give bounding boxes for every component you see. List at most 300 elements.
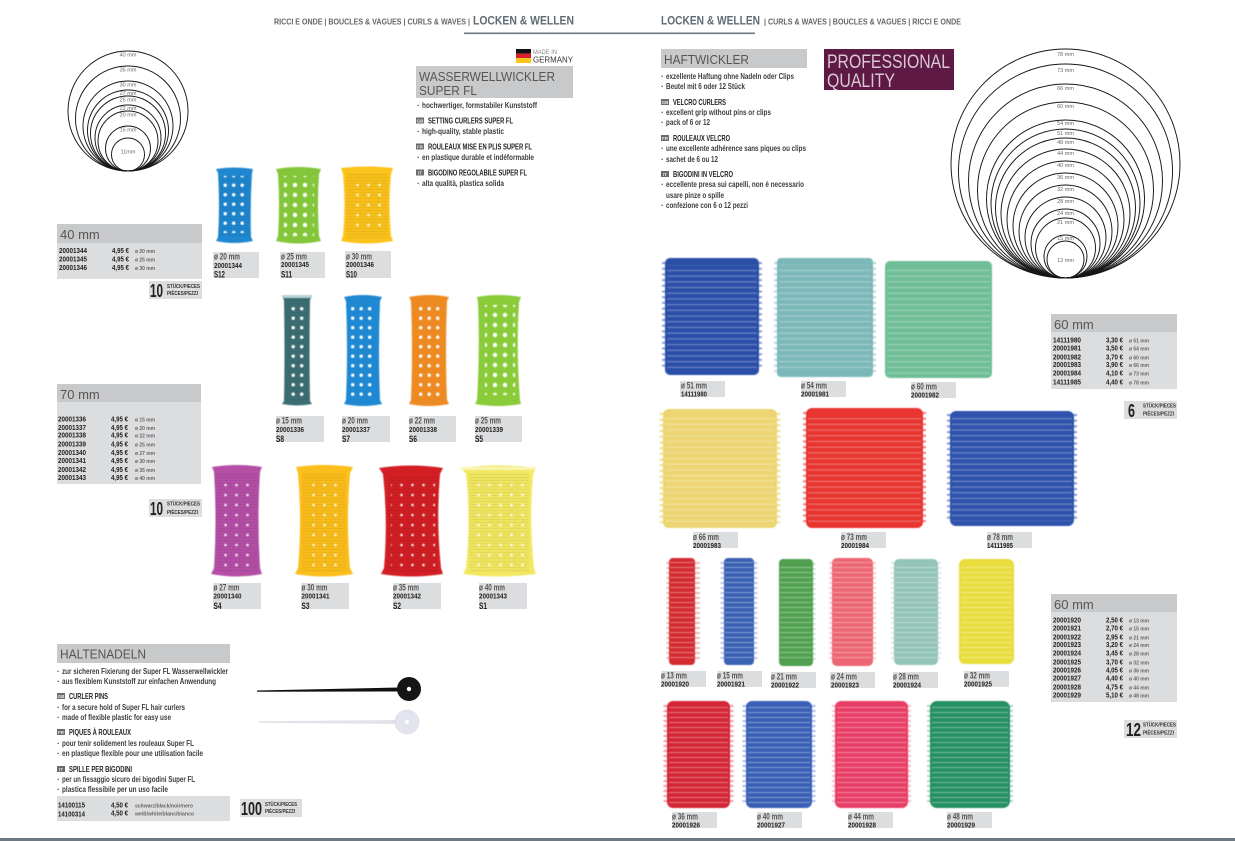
panel: Haftwickler description: ·	[661, 82, 664, 91]
price table: 70 mm: 4,95 €	[111, 448, 129, 457]
caption 44 mm	[848, 812, 893, 830]
caption S2: 20001342	[393, 592, 421, 600]
caption S5	[475, 416, 522, 445]
price table: 60 mm small velcro: 20001921	[1053, 624, 1081, 632]
curler S2 red	[379, 466, 443, 576]
price table: 60 mm small velcro: 20001923	[1053, 640, 1081, 649]
caption 36 mm	[672, 812, 717, 830]
caption S1: ø 40 mm	[479, 582, 505, 594]
price table: 60 mm large velcro: 3,30 €	[1106, 336, 1124, 344]
price table: 70 mm: 20001339	[58, 440, 86, 448]
caption 44 mm: ø 44 mm	[848, 812, 874, 822]
panel: Wasserwellwickler description: hochwertiger, formstabiler Kunststoff	[422, 101, 537, 110]
caption S5: S5	[475, 434, 483, 445]
caption S3: S3	[302, 601, 310, 612]
panel: Haftwickler description: ·	[661, 144, 664, 153]
panel: Wasserwellwickler description: ·	[417, 153, 420, 162]
caption 24 mm	[830, 672, 875, 690]
caption S1: 20001343	[479, 592, 507, 600]
price table: 60 mm large velcro: 14111985	[1053, 378, 1081, 386]
caption S6: S6	[409, 434, 417, 445]
pack size: 100 pieces: STÜCK/PIECES	[265, 801, 297, 808]
price table: 60 mm small velcro: 60 mm	[1054, 597, 1094, 612]
pack size: 10 pieces: 10	[150, 499, 163, 519]
size chart: 11 to 40 mm circles: 20 mm	[120, 112, 137, 118]
pack size: 100 pieces	[240, 799, 302, 819]
velcro curler 60 mm green	[885, 261, 992, 378]
price table: 60 mm large velcro: 20001981	[1053, 344, 1081, 352]
price table: 60 mm small velcro: 20001924	[1053, 648, 1082, 658]
price table: 40 mm: ø 20 mm	[135, 249, 155, 255]
price table: 60 mm small velcro: 4,75 €	[1106, 682, 1124, 692]
panel: Haltenadeln description: plastica flessibile per un uso facile	[62, 785, 168, 794]
panel: Haftwickler description: VELCRO CURLERS	[673, 98, 726, 107]
price table: 70 mm: ø 15 mm	[135, 418, 155, 424]
pack size: 100 pieces: 100	[241, 799, 262, 819]
panel: Haltenadeln description: ·	[57, 739, 60, 748]
panel: Haltenadeln description	[57, 644, 230, 794]
velcro curler 44 mm pink	[835, 701, 908, 808]
caption S10: S10	[346, 270, 357, 280]
panel: Haltenadeln description: FR	[58, 730, 65, 735]
panel: Haltenadeln description: pour tenir solidement les rouleaux Super FL	[62, 739, 194, 748]
panel: Haftwickler description: eccellente presa sui capelli, non è necessario	[666, 180, 804, 189]
panel: Wasserwellwickler description: ·	[417, 101, 420, 110]
caption S2	[393, 582, 441, 612]
page header left: LOCKEN & WELLEN	[473, 14, 574, 28]
size chart: 11 to 40 mm circles: 25 mm	[120, 98, 137, 104]
caption 21 mm: ø 21 mm	[771, 672, 797, 682]
caption 54 mm	[801, 380, 846, 398]
caption S8: S8	[276, 434, 284, 445]
caption 32 mm: 20001925	[964, 680, 992, 688]
price table: 70 mm: ø 22 mm	[135, 434, 155, 440]
curler S11 green	[276, 167, 321, 244]
price table: 60 mm small velcro: 3,70 €	[1106, 658, 1124, 666]
caption 32 mm	[964, 670, 1009, 688]
panel: Haltenadeln description: ·	[57, 703, 60, 712]
size chart: 13 to 78 mm circles: 60 mm	[1057, 104, 1074, 110]
caption S1	[479, 582, 527, 612]
caption S11: S11	[281, 270, 292, 280]
pack size: 10 pieces: STÜCK/PIECES	[167, 500, 200, 508]
price table: 70 mm: 20001338	[58, 430, 86, 440]
size chart: 13 to 78 mm circles: 66 mm	[1057, 86, 1074, 92]
velcro curler 73 mm red	[806, 408, 923, 528]
price table: 60 mm large velcro: ø 54 mm	[1129, 346, 1149, 352]
caption S5: ø 25 mm	[475, 416, 501, 426]
price table: 40 mm: 20001346	[59, 263, 87, 272]
caption 24 mm: ø 24 mm	[831, 672, 857, 682]
caption S8: ø 15 mm	[276, 416, 302, 426]
price table: 60 mm small velcro: 20001922	[1053, 632, 1081, 642]
caption S10	[345, 251, 391, 280]
caption 32 mm: ø 32 mm	[964, 670, 990, 682]
price table: 40 mm: 40 mm	[60, 227, 100, 242]
size chart: 13 to 78 mm circles: 54 mm	[1057, 121, 1074, 127]
pack size: 6 pieces: STÜCK/PIECES	[1143, 402, 1176, 410]
curler S1 pale yellow	[461, 466, 536, 576]
curler S7 blue	[344, 295, 382, 406]
pack size: 12 pieces	[1124, 720, 1177, 740]
caption 66 mm: ø 66 mm	[693, 532, 719, 543]
panel: Haftwickler description: BIGODINI IN VELCRO	[673, 170, 733, 179]
pack size: 10 pieces	[149, 499, 202, 519]
caption S6: 20001338	[409, 425, 437, 434]
panel: Wasserwellwickler description: GB	[417, 118, 424, 123]
price table: 70 mm: 4,95 €	[111, 465, 129, 474]
caption S12	[213, 252, 259, 280]
panel: Haftwickler description: ·	[661, 108, 664, 117]
price table: curler pins: 4,50 €	[111, 800, 129, 810]
size chart: 13 to 78 mm circles: 21 mm	[1057, 220, 1074, 226]
price table: 70 mm: 4,95 €	[111, 440, 129, 448]
pack size: 6 pieces: PIÈCES/PEZZI	[1143, 410, 1174, 418]
price table: 60 mm large velcro: 60 mm	[1054, 317, 1094, 332]
panel: Wasserwellwickler description: alta qualità, plastica solida	[422, 179, 504, 188]
caption 66 mm: 20001983	[693, 541, 721, 550]
caption S10: 20001346	[346, 260, 374, 269]
page header left	[274, 14, 574, 28]
price table: 70 mm: 20001342	[58, 465, 86, 474]
pack size: 10 pieces: PIÈCES/PEZZI	[167, 508, 198, 516]
price table: 60 mm small velcro: 20001925	[1053, 658, 1081, 666]
caption 73 mm: 20001984	[841, 541, 870, 550]
caption S8	[276, 416, 324, 445]
price table: 70 mm: 4,95 €	[111, 430, 129, 440]
price table: 60 mm small velcro: 2,70 €	[1106, 624, 1124, 632]
caption S11	[280, 252, 325, 280]
caption 28 mm: ø 28 mm	[893, 672, 919, 682]
size chart: 11 to 40 mm circles	[68, 51, 188, 171]
caption S7: S7	[342, 434, 350, 445]
panel: Haftwickler description: ·	[661, 180, 664, 189]
badge: made in Germany: MADE IN	[533, 49, 557, 56]
price table: 60 mm small velcro: ø 15 mm	[1129, 626, 1149, 632]
panel: Haftwickler description: IT	[663, 172, 667, 177]
caption S2: S2	[393, 601, 401, 612]
price table: 70 mm: 4,95 €	[111, 456, 129, 465]
caption 21 mm: 20001922	[771, 680, 799, 690]
price table: curler pins	[57, 796, 230, 821]
caption S3: ø 30 mm	[302, 582, 328, 594]
panel: Haftwickler description: confezione con 6 o 12 pezzi	[666, 201, 748, 210]
price table: 70 mm: 20001340	[58, 448, 86, 457]
size chart: 13 to 78 mm circles: 24 mm	[1057, 211, 1074, 217]
panel: Haftwickler description	[661, 49, 807, 210]
curler S6 orange	[409, 295, 449, 406]
caption S1: S1	[479, 601, 487, 612]
panel: Haftwickler description: FR	[662, 136, 669, 141]
page header right	[661, 14, 961, 28]
price table: 60 mm large velcro	[1051, 314, 1177, 389]
caption 78 mm: ø 78 mm	[987, 532, 1013, 543]
badge: made in Germany: GERMANY	[533, 56, 574, 64]
panel: Haftwickler description: exzellente Haftung ohne Nadeln oder Clips	[666, 72, 794, 81]
panel: Haltenadeln description: per un fissaggio sicuro dei bigodini Super FL	[62, 775, 195, 784]
price table: curler pins: 14100314	[58, 810, 86, 818]
caption S4: ø 27 mm	[214, 582, 240, 594]
panel: Haltenadeln description: ·	[57, 713, 60, 722]
caption 48 mm: ø 48 mm	[947, 812, 973, 822]
price table: 60 mm small velcro: 20001920	[1053, 616, 1081, 624]
size chart: 11 to 40 mm circles: 15 mm	[120, 128, 137, 134]
price table: 40 mm: ø 25 mm	[135, 258, 155, 264]
panel: Haftwickler description: pack of 6 or 12	[666, 118, 710, 127]
caption 78 mm	[987, 532, 1032, 550]
panel: Haltenadeln description: PIQUES À ROULEAUX	[69, 728, 131, 737]
size chart: 13 to 78 mm circles: 32 mm	[1057, 187, 1074, 193]
caption S6: ø 22 mm	[409, 416, 435, 426]
price table: curler pins: weiß/white/blanc/bianco	[134, 812, 195, 818]
price table: 70 mm: ø 35 mm	[135, 468, 155, 474]
caption 40 mm: 20001927	[757, 820, 785, 830]
panel: Wasserwellwickler description: ROULEAUX MISE EN PLIS SUPER FL	[428, 142, 532, 152]
price table: 60 mm small velcro: 5,10 €	[1106, 690, 1124, 700]
price table: 60 mm large velcro: 3,90 €	[1106, 360, 1124, 369]
curler S10 yellow	[341, 166, 393, 244]
price table: 60 mm large velcro: 20001983	[1053, 360, 1081, 369]
price table: 70 mm: 4,95 €	[111, 423, 129, 432]
price table: 60 mm small velcro	[1051, 594, 1177, 702]
price table: 60 mm large velcro: 3,50 €	[1106, 344, 1124, 352]
badge: professional quality	[824, 49, 954, 92]
price table: 70 mm: ø 25 mm	[135, 442, 155, 448]
price table: 60 mm small velcro: 20001929	[1053, 690, 1081, 700]
price table: 60 mm small velcro: 3,45 €	[1106, 648, 1124, 658]
size chart: 13 to 78 mm circles: 28 mm	[1057, 199, 1074, 205]
pack size: 10 pieces: 10	[150, 281, 163, 301]
price table: 60 mm small velcro: 4,40 €	[1106, 674, 1124, 682]
price table: 60 mm small velcro: 20001926	[1053, 666, 1081, 674]
price table: 60 mm large velcro: ø 60 mm	[1129, 356, 1149, 362]
caption 51 mm: ø 51 mm	[681, 380, 707, 392]
size chart: 13 to 78 mm circles: 51 mm	[1057, 131, 1074, 137]
velcro curler 21 mm green	[779, 559, 813, 666]
panel: Wasserwellwickler description: WASSERWELLWICKLER	[419, 69, 555, 84]
curler S4 purple	[211, 465, 262, 576]
price table: 60 mm small velcro: ø 24 mm	[1129, 643, 1149, 649]
price table: 60 mm large velcro: ø 78 mm	[1129, 380, 1149, 386]
panel: Wasserwellwickler description: ·	[417, 179, 420, 188]
price table: 60 mm large velcro: 20001984	[1053, 368, 1082, 378]
caption S4: 20001340	[214, 592, 242, 600]
price table: 60 mm large velcro: 4,10 €	[1106, 368, 1124, 378]
caption 48 mm	[947, 812, 992, 830]
panel: Haftwickler description: Beutel mit 6 oder 12 Stück	[666, 82, 745, 91]
panel: Wasserwellwickler description: SETTING CURLERS SUPER FL	[428, 116, 513, 126]
caption 60 mm	[911, 382, 956, 400]
size chart: 11 to 40 mm circles: 22 mm	[120, 106, 137, 112]
price table: 40 mm: 20001345	[59, 254, 87, 264]
price table: 60 mm large velcro: ø 66 mm	[1129, 363, 1149, 369]
velcro curler 66 mm yellow	[663, 409, 777, 528]
price table: 60 mm small velcro: 4,05 €	[1106, 666, 1124, 674]
pack size: 12 pieces: 12	[1126, 720, 1141, 740]
price table: 60 mm small velcro: 20001928	[1053, 682, 1081, 692]
caption S11: ø 25 mm	[281, 252, 307, 262]
price table: 40 mm: ø 30 mm	[135, 266, 155, 272]
caption S2: ø 35 mm	[393, 582, 419, 594]
caption 73 mm: ø 73 mm	[841, 532, 867, 543]
caption S10: ø 30 mm	[346, 252, 372, 262]
price table: 60 mm small velcro: 2,50 €	[1106, 616, 1124, 624]
size chart: 11 to 40 mm circles: 35 mm	[120, 68, 137, 74]
panel: Wasserwellwickler description	[416, 66, 573, 188]
caption 36 mm: ø 36 mm	[672, 812, 698, 822]
price table: 60 mm large velcro: 4,40 €	[1106, 378, 1124, 386]
panel: Haftwickler description: ·	[661, 201, 664, 210]
panel: Haltenadeln description: CURLER PINS	[69, 692, 108, 701]
caption 73 mm	[841, 532, 886, 550]
size chart: 13 to 78 mm circles: 73 mm	[1057, 68, 1074, 74]
panel: Haftwickler description: GB	[662, 100, 669, 105]
panel: Haltenadeln description: aus flexiblem Kunststoff zur einfachen Anwendung	[62, 677, 216, 686]
pack size: 10 pieces: PIÈCES/PEZZI	[167, 289, 198, 297]
panel: Wasserwellwickler description: FR	[417, 144, 424, 149]
caption S7: 20001337	[342, 425, 370, 434]
caption S12: 20001344	[214, 261, 243, 270]
velcro curler 51 mm blue	[665, 258, 759, 375]
price table: 60 mm small velcro: ø 48 mm	[1129, 694, 1149, 700]
price table: 60 mm large velcro: 3,70 €	[1106, 352, 1124, 362]
price table: 70 mm: 20001341	[58, 456, 86, 465]
caption S7: ø 20 mm	[342, 416, 368, 426]
velcro curler 36 mm red	[667, 701, 730, 808]
price table: 70 mm: ø 27 mm	[135, 451, 155, 457]
caption 13 mm	[661, 670, 706, 688]
price table: 70 mm: 4,95 €	[111, 414, 129, 424]
price table: 70 mm: 20001343	[58, 473, 86, 482]
price table: 70 mm: ø 40 mm	[135, 476, 155, 482]
price table: 60 mm small velcro: ø 36 mm	[1129, 668, 1149, 674]
price table: curler pins: 4,50 €	[111, 808, 129, 818]
price table: curler pins: schwarz/black/noir/nero	[135, 804, 194, 810]
caption 36 mm: 20001926	[672, 820, 700, 830]
panel: Haltenadeln description: SPILLE PER BIGODINI	[69, 765, 132, 774]
price table: 60 mm small velcro: ø 21 mm	[1129, 636, 1149, 642]
panel: Haltenadeln description: IT	[59, 767, 63, 772]
price table: 70 mm: 20001337	[58, 423, 86, 432]
page header left: RICCI E ONDE | BOUCLES & VAGUES | CURLS & WAVES |	[274, 16, 470, 26]
panel: Haftwickler description: sachet de 6 ou 12	[666, 155, 718, 164]
caption 21 mm	[771, 672, 816, 690]
size chart: 13 to 78 mm circles: 48 mm	[1057, 140, 1074, 146]
size chart: 11 to 40 mm circles: 30 mm	[120, 82, 137, 88]
caption 28 mm	[893, 672, 938, 690]
caption S4	[213, 582, 261, 612]
caption S3: 20001341	[302, 592, 330, 600]
price table: 60 mm large velcro: 20001982	[1053, 352, 1081, 362]
panel: Haftwickler description: ·	[661, 118, 664, 127]
price table: 70 mm: ø 30 mm	[135, 459, 155, 465]
caption S4: S4	[214, 601, 222, 612]
panel: Haftwickler description: ·	[661, 155, 664, 164]
pack size: 12 pieces: STÜCK/PIECES	[1143, 722, 1176, 728]
panel: Haftwickler description: ·	[661, 72, 664, 81]
panel: Wasserwellwickler description: ·	[417, 127, 420, 136]
caption 28 mm: 20001924	[893, 680, 922, 690]
panel: Haltenadeln description: en plastique flexible pour une utilisation facile	[62, 749, 203, 758]
panel: Haftwickler description: ROULEAUX VELCRO	[673, 134, 730, 143]
pack size: 100 pieces: PIÈCES/PEZZI	[265, 807, 295, 815]
badge: professional quality: QUALITY	[827, 71, 895, 92]
price table: 70 mm	[57, 384, 201, 484]
panel: Haltenadeln description: HALTENADELN	[60, 646, 146, 662]
panel: Wasserwellwickler description: en plastique durable et indéformable	[422, 153, 534, 162]
panel: Haltenadeln description: ·	[57, 785, 60, 794]
size chart: 13 to 78 mm circles: 13 mm	[1057, 258, 1074, 264]
price table: 60 mm small velcro: 20001927	[1053, 674, 1081, 682]
panel: Haltenadeln description: ·	[57, 677, 60, 686]
velcro curler 78 mm blue	[950, 411, 1074, 526]
pack size: 12 pieces: PIÈCES/PEZZI	[1143, 728, 1174, 736]
caption 60 mm: ø 60 mm	[911, 382, 937, 392]
badge: made in Germany	[516, 49, 574, 64]
panel: Haltenadeln description: ·	[57, 775, 60, 784]
panel: Haltenadeln description: ·	[57, 667, 60, 676]
curler S8 teal	[282, 295, 312, 406]
price table: 60 mm large velcro: ø 51 mm	[1129, 338, 1149, 344]
caption 15 mm: ø 15 mm	[717, 670, 743, 682]
price table: curler pins: 14100115	[58, 800, 85, 810]
velcro curler 24 mm pink	[832, 558, 873, 666]
price table: 60 mm small velcro: ø 40 mm	[1129, 676, 1149, 682]
price table: 60 mm small velcro: ø 13 mm	[1129, 618, 1149, 624]
price table: 40 mm: 4,95 €	[112, 254, 130, 264]
panel: Haftwickler description: usare pinze o spille	[666, 191, 724, 200]
badge: professional quality: PROFESSIONAL	[827, 52, 950, 73]
panel: Haftwickler description: excellent grip without pins or clips	[666, 108, 771, 117]
panel: Haltenadeln description: GB	[58, 694, 65, 699]
panel: Haltenadeln description: made of flexible plastic for easy use	[62, 713, 171, 722]
panel: Wasserwellwickler description: SUPER FL	[419, 83, 477, 98]
caption 40 mm	[757, 812, 802, 830]
price table: 40 mm: 4,95 €	[112, 246, 130, 255]
caption 51 mm	[680, 380, 725, 398]
price table: 70 mm: 20001336	[58, 414, 86, 424]
pack size: 6 pieces	[1124, 401, 1177, 421]
size chart: 11 to 40 mm circles: 40 mm	[120, 52, 137, 58]
panel: Wasserwellwickler description: BIGODINO REGOLABILE SUPER FL	[428, 168, 527, 178]
curler S3 yellow	[295, 465, 353, 576]
velcro curler 15 mm blue	[724, 558, 754, 665]
panel: Haltenadeln description: ·	[57, 749, 60, 758]
caption S12: S12	[214, 270, 225, 280]
caption S5: 20001339	[475, 425, 503, 434]
price table: 40 mm	[57, 224, 202, 279]
price table: 60 mm small velcro: 3,20 €	[1106, 640, 1124, 649]
price table: 60 mm small velcro: ø 28 mm	[1129, 652, 1149, 658]
size chart: 13 to 78 mm circles: 36 mm	[1057, 175, 1074, 181]
caption S11: 20001345	[281, 260, 309, 269]
velcro curler 54 mm teal	[777, 258, 873, 377]
panel: Haltenadeln description: for a secure hold of Super FL hair curlers	[62, 703, 185, 712]
caption 15 mm	[717, 670, 762, 688]
panel: Wasserwellwickler description: IT	[418, 170, 422, 175]
caption 54 mm: 20001981	[801, 390, 829, 398]
velcro curler 13 mm red	[669, 558, 696, 665]
icon: white curler pin	[259, 710, 419, 734]
price table: 60 mm small velcro: ø 32 mm	[1129, 660, 1149, 666]
caption 51 mm: 14111980	[681, 390, 707, 398]
price table: 40 mm: 4,95 €	[112, 263, 130, 272]
size chart: 13 to 78 mm circles: 15 mm	[1057, 236, 1074, 242]
velcro curler 28 mm teal	[894, 559, 938, 665]
caption 24 mm: 20001923	[831, 680, 859, 690]
panel: Wasserwellwickler description: high-quality, stable plastic	[422, 127, 504, 136]
caption 13 mm: ø 13 mm	[661, 670, 687, 682]
